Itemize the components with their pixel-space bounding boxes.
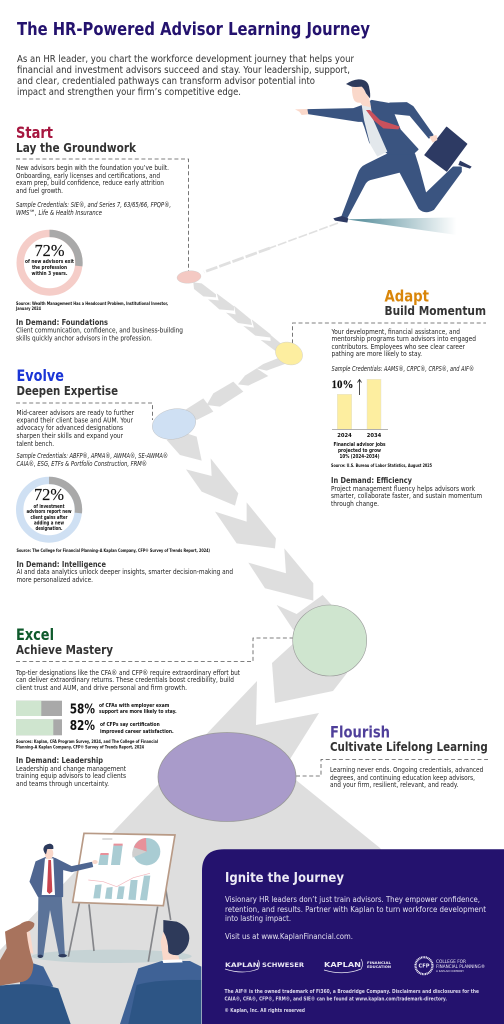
audience: woman [0,921,71,1024]
body text: exam prep, build confidence, reduce early attrition [16,178,164,187]
logo: college for financial planning: A KAPLAN COMPANY [436,969,464,973]
intro text: impact and strengthen your firm’s competitive edge. [17,87,241,98]
presenter [30,844,98,958]
source: Source: Wealth Management Has a Headcount Problem, Institutional Investor, [16,301,168,307]
stat bar: 58 percent [16,701,177,718]
body text: talent bench. [16,439,54,448]
donut chart: 72 percent client gains: client gains after [30,515,68,521]
floor shadow [32,950,192,963]
body text: and fuel growth. [16,186,63,195]
donut chart: 72 percent client gains: of investment [34,504,65,510]
sample credentials: Sample Credentials: SIE®, and Series 7, 63/65/66, FPQP®, [16,200,171,209]
intro text: As an HR leader, you chart the workforce development journey that helps your [17,54,354,65]
body text: can deliver extraordinary returns. These credentials boost credibility, build [16,675,234,684]
path: dashes from runner to start [204,223,338,272]
donut chart: 72 percent exit: the profession [32,265,67,271]
disclaimer [224,989,479,1014]
in demand: efficiency [331,476,482,508]
marker: flourish [158,732,296,822]
section: adapt [292,286,486,508]
in demand: foundations: Client communication, confidence, and business-building [16,326,183,334]
source: Source: U.S. Bureau of Labor Statistics, August 2025 [331,463,432,469]
in demand: foundations: In Demand: Foundations [16,318,108,327]
heading: flourish: Flourish [330,722,390,742]
section: evolve [16,366,233,584]
donut chart: 72 percent exit: of new advisors exit [25,259,74,265]
body text: advocacy for advanced designations [16,423,123,432]
donut chart: 72 percent client gains: adding a new [34,520,64,526]
bar chart: advisor jobs growth: 10% [332,379,354,391]
intro text [17,54,354,98]
bar chart: advisor jobs growth: Financial advisor jobs [334,442,386,448]
body text: pathing are more likely to stay. [332,349,422,358]
body text: contributors. Employees who see clear career [332,342,465,351]
stat bar: 58 percent: support are more likely to stay. [99,709,177,715]
in demand: leadership: training equip advisors to lead clients [16,771,126,780]
source: Planning–A Kaplan Company, CFP® Survey of Trends Report, 2024 [16,744,144,750]
in demand: intelligence: In Demand: Intelligence [16,560,106,569]
panel: ignite the journey [202,849,504,1024]
subheading: build momentum: Build Momentum [384,304,486,318]
bar chart: advisor jobs growth: 2024 [337,433,352,439]
body text: Top-tier designations like the CFA® and CFP® require extraordinary effort but [15,668,240,677]
in demand: leadership: and teams through uncertainty. [16,779,109,788]
logo: college for financial planning: COLLEGE FOR [436,959,466,965]
in demand: efficiency: In Demand: Efficiency [331,476,412,485]
body text [330,765,483,789]
path: adapt to evolve to excel chevrons [167,357,332,630]
shadow [347,217,457,235]
body text: and your firm, resilient, relevant, and ready. [330,780,458,789]
donut chart: 72 percent exit [20,233,79,292]
body text [331,327,476,358]
audience: man [120,920,201,1024]
presentation board [73,833,175,906]
heading: start: Start [16,123,53,142]
subheading: lay the groundwork: Lay the Groundwork [16,141,137,155]
in demand: foundations: skills quickly anchor advisors in the profession. [16,334,152,342]
easel legs [68,888,171,962]
bar chart: advisor jobs growth: 2034 [367,433,382,439]
path: flourish widening beam [0,681,504,1024]
section: flourish [296,722,488,789]
panel body: into lasting impact. [225,913,291,923]
stat bar: 82 percent: of CFPs say certification [100,722,160,728]
logo: kaplan schweser: SCHWESER [262,961,304,969]
body text: sharpen their skills and expand your [16,431,123,440]
marker: evolve [149,405,199,443]
in demand: efficiency: through change. [331,499,379,508]
heading: excel: Excel [16,625,54,644]
body text: Onboarding, early licenses and certifications, and [16,171,160,180]
donut chart: 72 percent client gains: 72% [34,485,64,504]
in demand: intelligence: more personalized advice. [16,575,93,584]
marker: adapt [272,338,306,369]
source: Source: The College for Financial Planning–A Kaplan Company, CFP® Survey of Trends Report, 2024) [16,548,210,554]
stat bar: 58 percent: of CFAs with employer exam [99,703,169,709]
marker: excel [293,605,367,676]
stat bar: 82 percent: improved career satisfaction. [100,729,174,735]
subheading: achieve mastery: Achieve Mastery [16,643,113,657]
path: excel to flourish chevron [272,642,347,703]
stat bar: 82 percent [16,718,174,735]
donut chart: 72 percent exit: within 3 years. [32,271,68,277]
donut chart: 72 percent client gains: designation. [36,526,63,532]
logo: college for financial planning: CFP [418,964,430,970]
in demand: leadership: In Demand: Leadership [16,756,103,765]
marker: start [177,270,201,284]
illustration: presenter and audience [0,833,201,1024]
body text: expand their client base and AUM. Your [16,416,133,424]
bar chart: advisor jobs growth [332,379,388,460]
disclaimer: © Kaplan, Inc. All rights reserved [224,1008,305,1014]
bar chart: advisor jobs growth: projected to grow [338,448,381,454]
logo: kaplan schweser [225,960,304,972]
sample credentials: CAIA®, ESG, ETFs & Portfolio Construction, FRM® [16,459,147,468]
intro text: and clear, credentialed pathways can transform advisor potential into [17,76,315,87]
panel body [225,894,487,941]
body text [16,408,134,448]
source [16,739,158,750]
body text: client trust and AUM, and drive personal and firm growth. [16,683,187,692]
logo: college for financial planning [416,957,485,974]
source [15,301,168,312]
logo: kaplan schweser: KAPLAN [225,961,259,969]
section: start [15,123,188,342]
source: January 2024 [15,306,41,312]
donut chart: 72 percent exit: 72% [34,241,65,260]
sample credentials: WMS℠, Life & Health Insurance [16,208,102,217]
subheading: deepen expertise: Deepen Expertise [16,384,118,398]
in demand: leadership: Leadership and change management [16,764,126,773]
donut chart: 72 percent client gains [20,480,78,539]
panel body: Visit us at www.KaplanFinancial.com. [225,931,353,941]
sample credentials: Sample Credentials: ABFP®, APMA®, AWMA®, SE-AWMA® [16,451,168,460]
panel heading: Ignite the Journey [225,870,344,886]
intro text: financial and investment advisors succeed and stay. Your leadership, support, [17,65,350,76]
body text [15,668,240,692]
logo: kaplan financial education: FINANCIAL [367,961,392,965]
body text [16,163,169,195]
body text: Your development, financial assistance, and [331,327,460,336]
source: Sources: Kaplan, CFA Program Survey, 2024, and The College of Financial [16,739,158,745]
section: excel [15,625,293,788]
journey path [0,223,504,1024]
path: start to adapt chevrons [193,282,281,352]
logo: kaplan financial education [324,959,392,973]
body text: mentorship programs turn advisors into engaged [332,334,476,343]
illustration: running advisor [295,79,472,235]
in demand: foundations [16,318,183,342]
title: The HR-Powered Advisor Learning Journey [17,19,370,40]
logo: kaplan financial education: KAPLAN [324,961,361,969]
sample credentials [16,451,168,468]
sample credentials [16,200,171,217]
in demand: intelligence: AI and data analytics unlock deeper insights, smarter decision-making and [16,567,233,576]
in demand: intelligence [16,560,233,584]
donut chart: 72 percent client gains: advisors report new [26,509,72,515]
stat bar: 58 percent: 58% [70,702,95,718]
heading: evolve: Evolve [16,366,64,385]
bar chart: advisor jobs growth: 10% (2024–2034) [340,454,380,460]
logo: kaplan financial education: EDUCATION [367,965,391,969]
stat bar: 82 percent: 82% [70,718,95,734]
body text: New advisors begin with the foundation you’ve built. [16,163,169,172]
logo: college for financial planning: FINANCIAL PLANNING® [436,963,485,970]
body text: Mid-career advisors are ready to further [16,408,134,417]
heading: adapt: Adapt [384,286,429,306]
in demand: efficiency: Project management fluency helps advisors work [331,484,476,493]
in demand: leadership [16,756,126,788]
